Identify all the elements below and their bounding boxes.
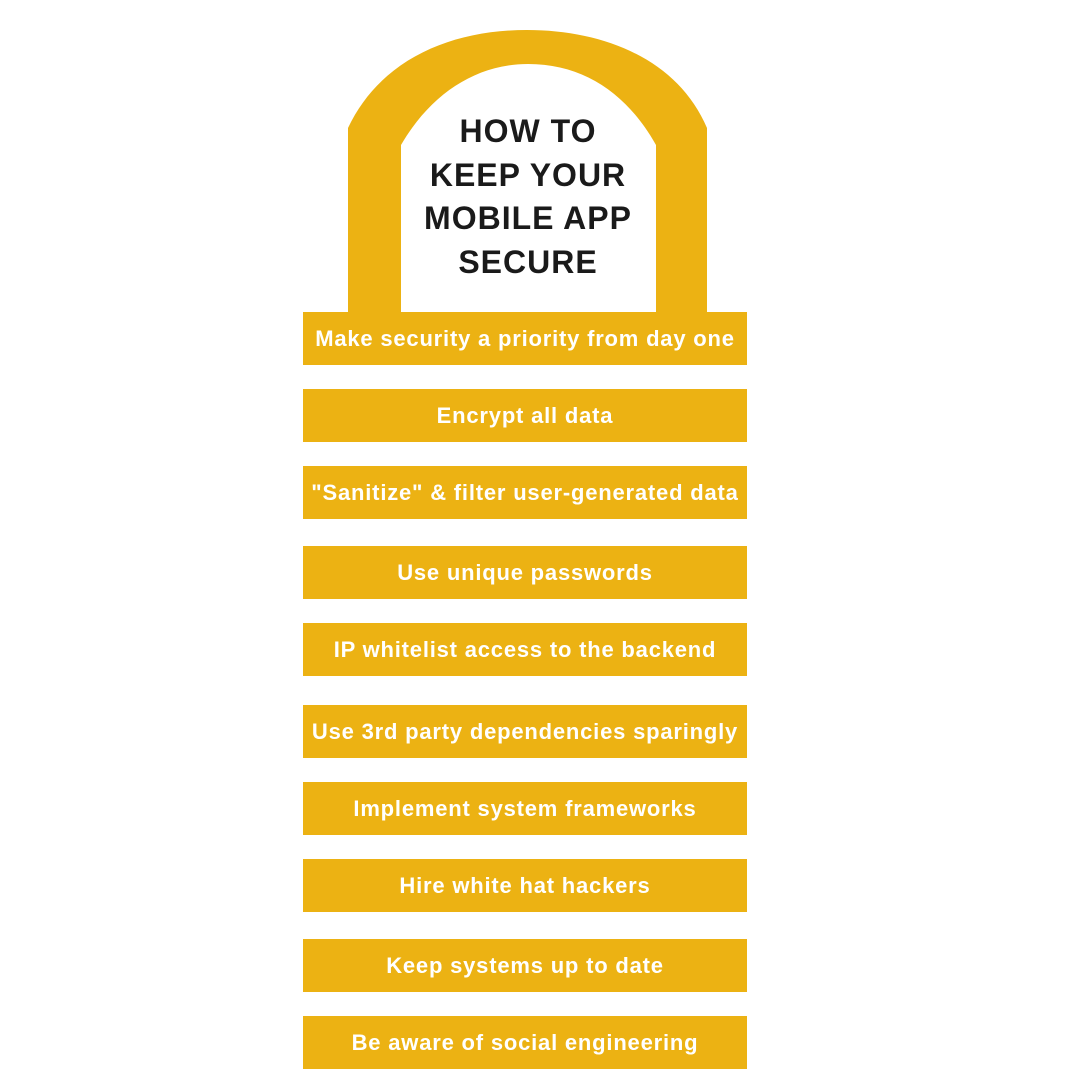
bar 9 [303, 939, 747, 992]
title [424, 113, 632, 280]
bar 10: Be aware of social engineering [352, 1030, 698, 1054]
bar 8: Hire white hat hackers [399, 872, 651, 898]
bar 1 [303, 312, 747, 365]
bar 6: Use 3rd party dependencies sparingly [312, 718, 738, 744]
bar 7 [303, 782, 747, 835]
bar 5: IP whitelist access to the backend [334, 636, 716, 662]
bar 6 [303, 705, 747, 758]
bar 5 [303, 623, 747, 676]
bar 8 [303, 859, 747, 912]
title: SECURE [458, 244, 598, 280]
title: KEEP YOUR [430, 156, 626, 192]
bar 3: "Sanitize" & filter user-generated data [311, 480, 739, 504]
bar 9: Keep systems up to date [386, 952, 664, 978]
bar 4: Use unique passwords [397, 560, 653, 584]
bar 3 [303, 466, 747, 519]
bar 7: Implement system frameworks [353, 796, 697, 820]
bar 10 [303, 1016, 747, 1069]
bar 4 [303, 546, 747, 599]
bar 2: Encrypt all data [437, 402, 613, 428]
bar 1: Make security a priority from day one [315, 326, 735, 350]
title: MOBILE APP [424, 200, 632, 236]
title: HOW TO [460, 113, 596, 149]
bar 2 [303, 389, 747, 442]
